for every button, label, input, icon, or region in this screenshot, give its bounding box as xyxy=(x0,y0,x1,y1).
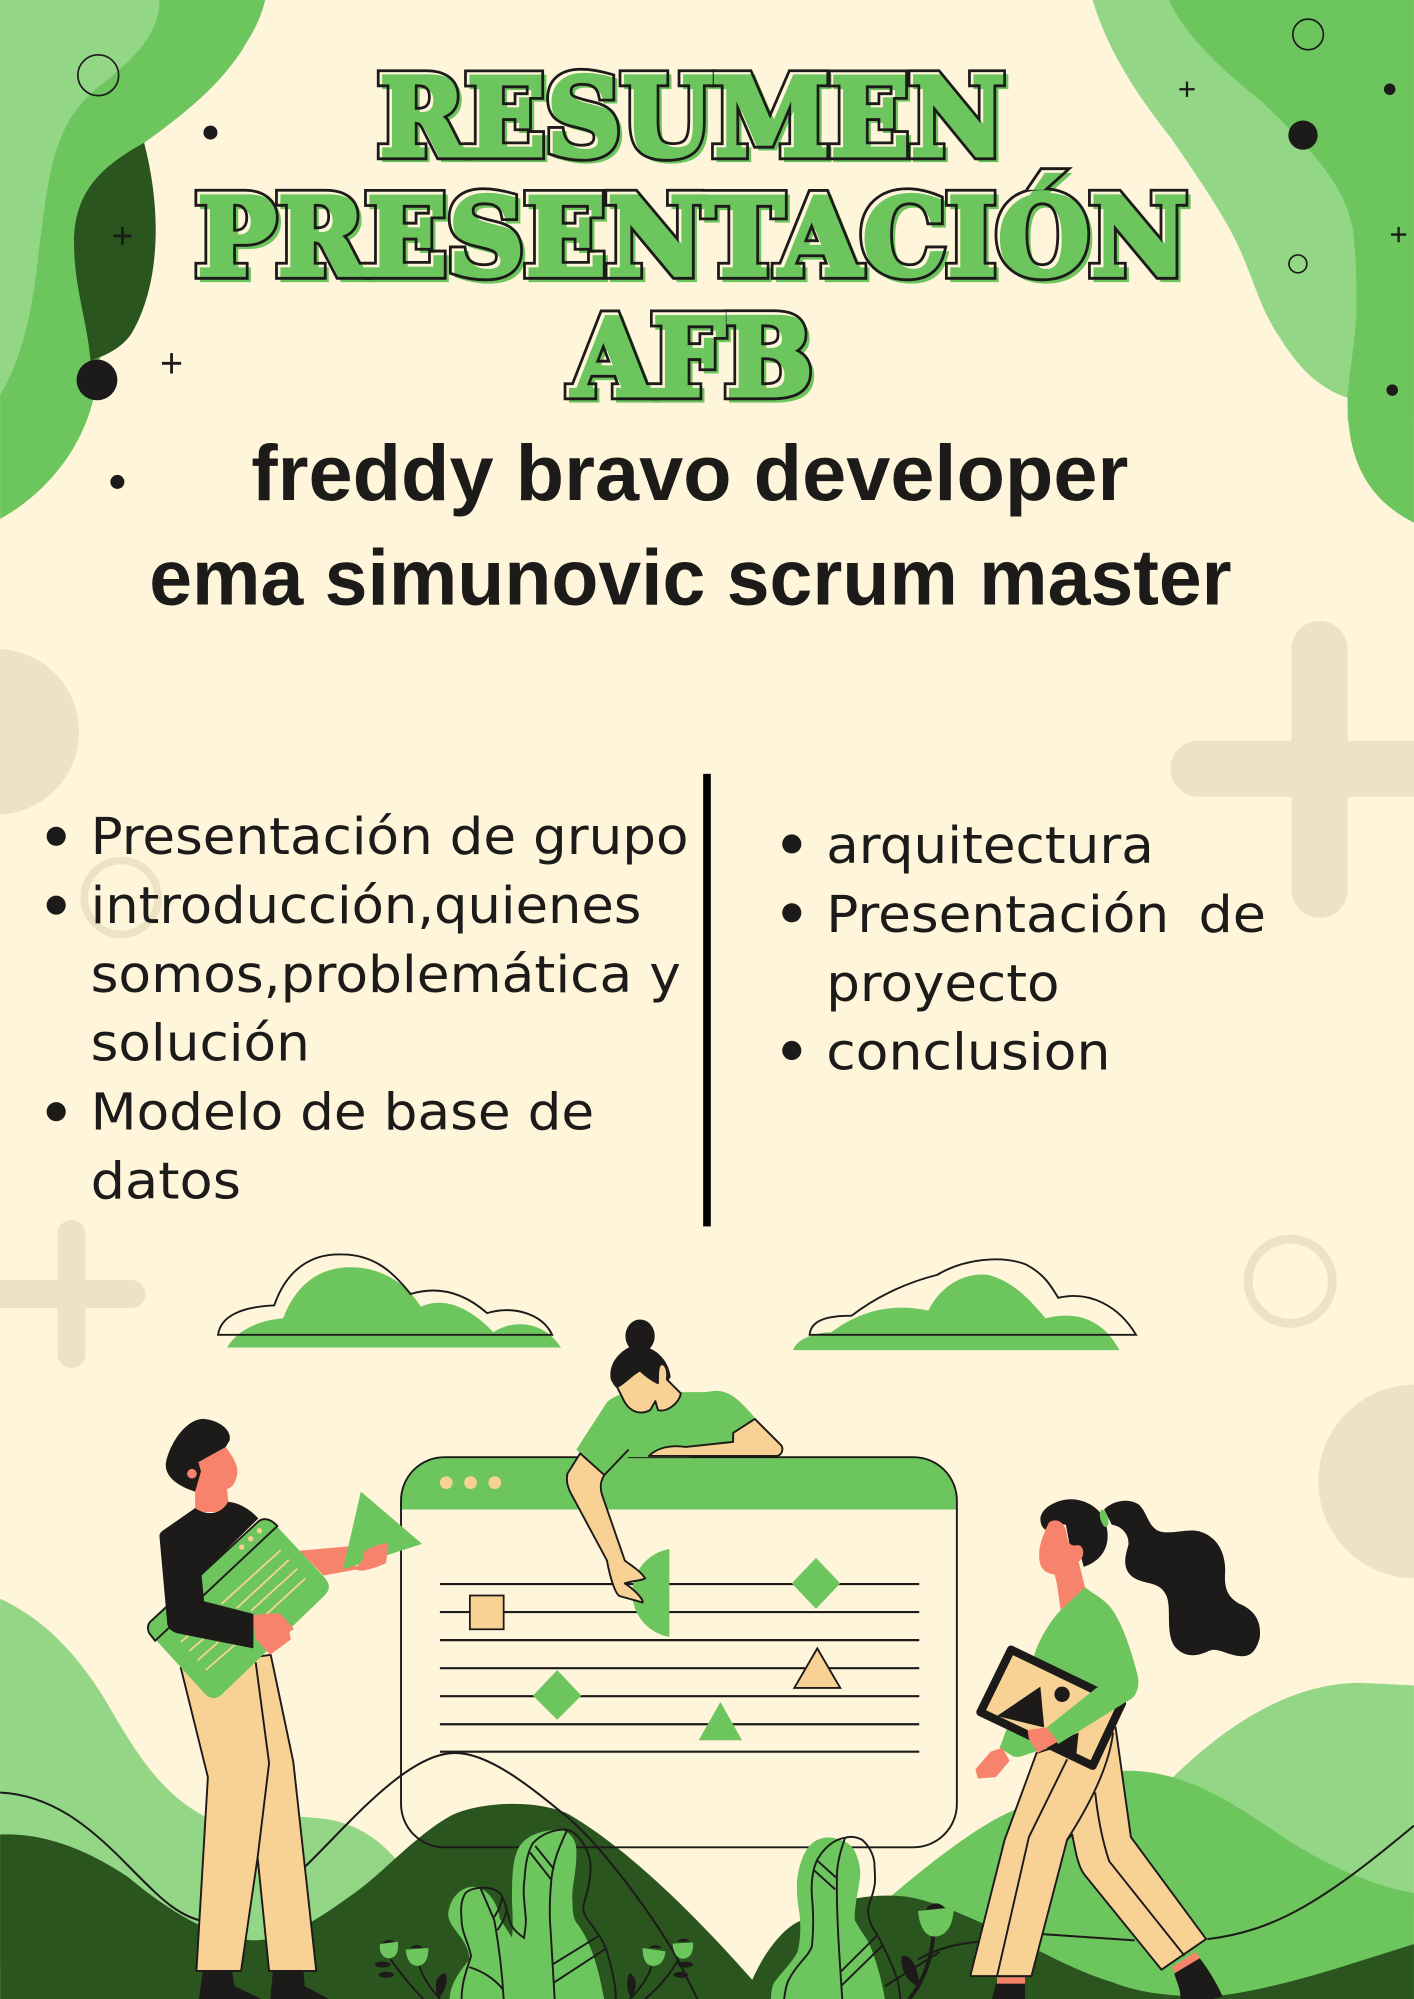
agenda list: right column: Presentación xyxy=(826,886,1169,945)
agenda list: left column: introducción,quienes xyxy=(91,877,641,936)
hand xyxy=(352,1543,388,1571)
agenda list: left column: somos,problemática y xyxy=(91,946,681,1005)
hands xyxy=(1028,1727,1058,1753)
figure: woman leaning over window xyxy=(567,1319,782,1603)
plant group left xyxy=(448,1829,616,1999)
hair xyxy=(166,1419,230,1492)
agenda list: right column: arquitectura xyxy=(826,817,1154,876)
title xyxy=(194,68,1191,403)
top-left green blob xyxy=(0,0,265,519)
plant group centre xyxy=(771,1837,900,1999)
agenda list: right column: de xyxy=(1198,886,1266,945)
neck and face xyxy=(195,1447,237,1512)
team names xyxy=(149,428,1232,621)
team names: freddy bravo developer xyxy=(251,428,1128,517)
top-right green blob xyxy=(1093,0,1414,523)
column divider xyxy=(703,774,711,1226)
arms xyxy=(567,1453,645,1603)
tablet xyxy=(980,1650,1122,1766)
triangle shape held xyxy=(343,1492,422,1569)
title: AFB xyxy=(573,296,816,424)
tablet xyxy=(149,1519,329,1698)
title: RESUMEN xyxy=(381,56,1009,184)
agenda list: right column xyxy=(782,817,1266,1083)
shirt xyxy=(576,1391,755,1475)
face xyxy=(617,1364,681,1413)
trousers xyxy=(970,1727,1206,1976)
forearm sleeve xyxy=(1047,1674,1138,1744)
shirt xyxy=(1000,1587,1138,1757)
agenda list: right column: proyecto xyxy=(826,955,1060,1014)
beige background decorations xyxy=(0,621,1414,1578)
hair xyxy=(610,1319,671,1396)
figure: woman with ponytail and tablet xyxy=(970,1499,1260,1999)
sweater xyxy=(159,1502,258,1648)
ankles and shoes xyxy=(997,1952,1200,1984)
chart shapes xyxy=(470,1549,840,1740)
trousers xyxy=(181,1655,316,1971)
figure: man with tablet xyxy=(148,1419,422,1999)
ponytail xyxy=(1104,1501,1260,1656)
flowers xyxy=(375,1903,954,1999)
agenda list: left column: Modelo de base de xyxy=(91,1084,594,1143)
face xyxy=(1039,1520,1085,1610)
hand on tablet xyxy=(253,1613,294,1655)
title: PRESENTACIÓN xyxy=(199,176,1191,304)
agenda list: left column: solución xyxy=(91,1015,310,1074)
cloud right xyxy=(793,1259,1136,1350)
browser window panel xyxy=(400,1457,958,1847)
team names: ema simunovic scrum master xyxy=(149,532,1232,621)
bottom hills xyxy=(0,1599,1414,1999)
cloud left xyxy=(218,1254,561,1348)
thin landscape curves xyxy=(0,1753,1414,1999)
agenda list: left column: Presentación de grupo xyxy=(91,808,689,867)
hair xyxy=(1040,1499,1108,1567)
shoes xyxy=(199,1971,329,1999)
pointing arm xyxy=(299,1546,357,1575)
agenda list: right column: conclusion xyxy=(826,1024,1110,1083)
agenda list: left column xyxy=(47,808,689,1211)
agenda list: left column: datos xyxy=(91,1152,241,1211)
